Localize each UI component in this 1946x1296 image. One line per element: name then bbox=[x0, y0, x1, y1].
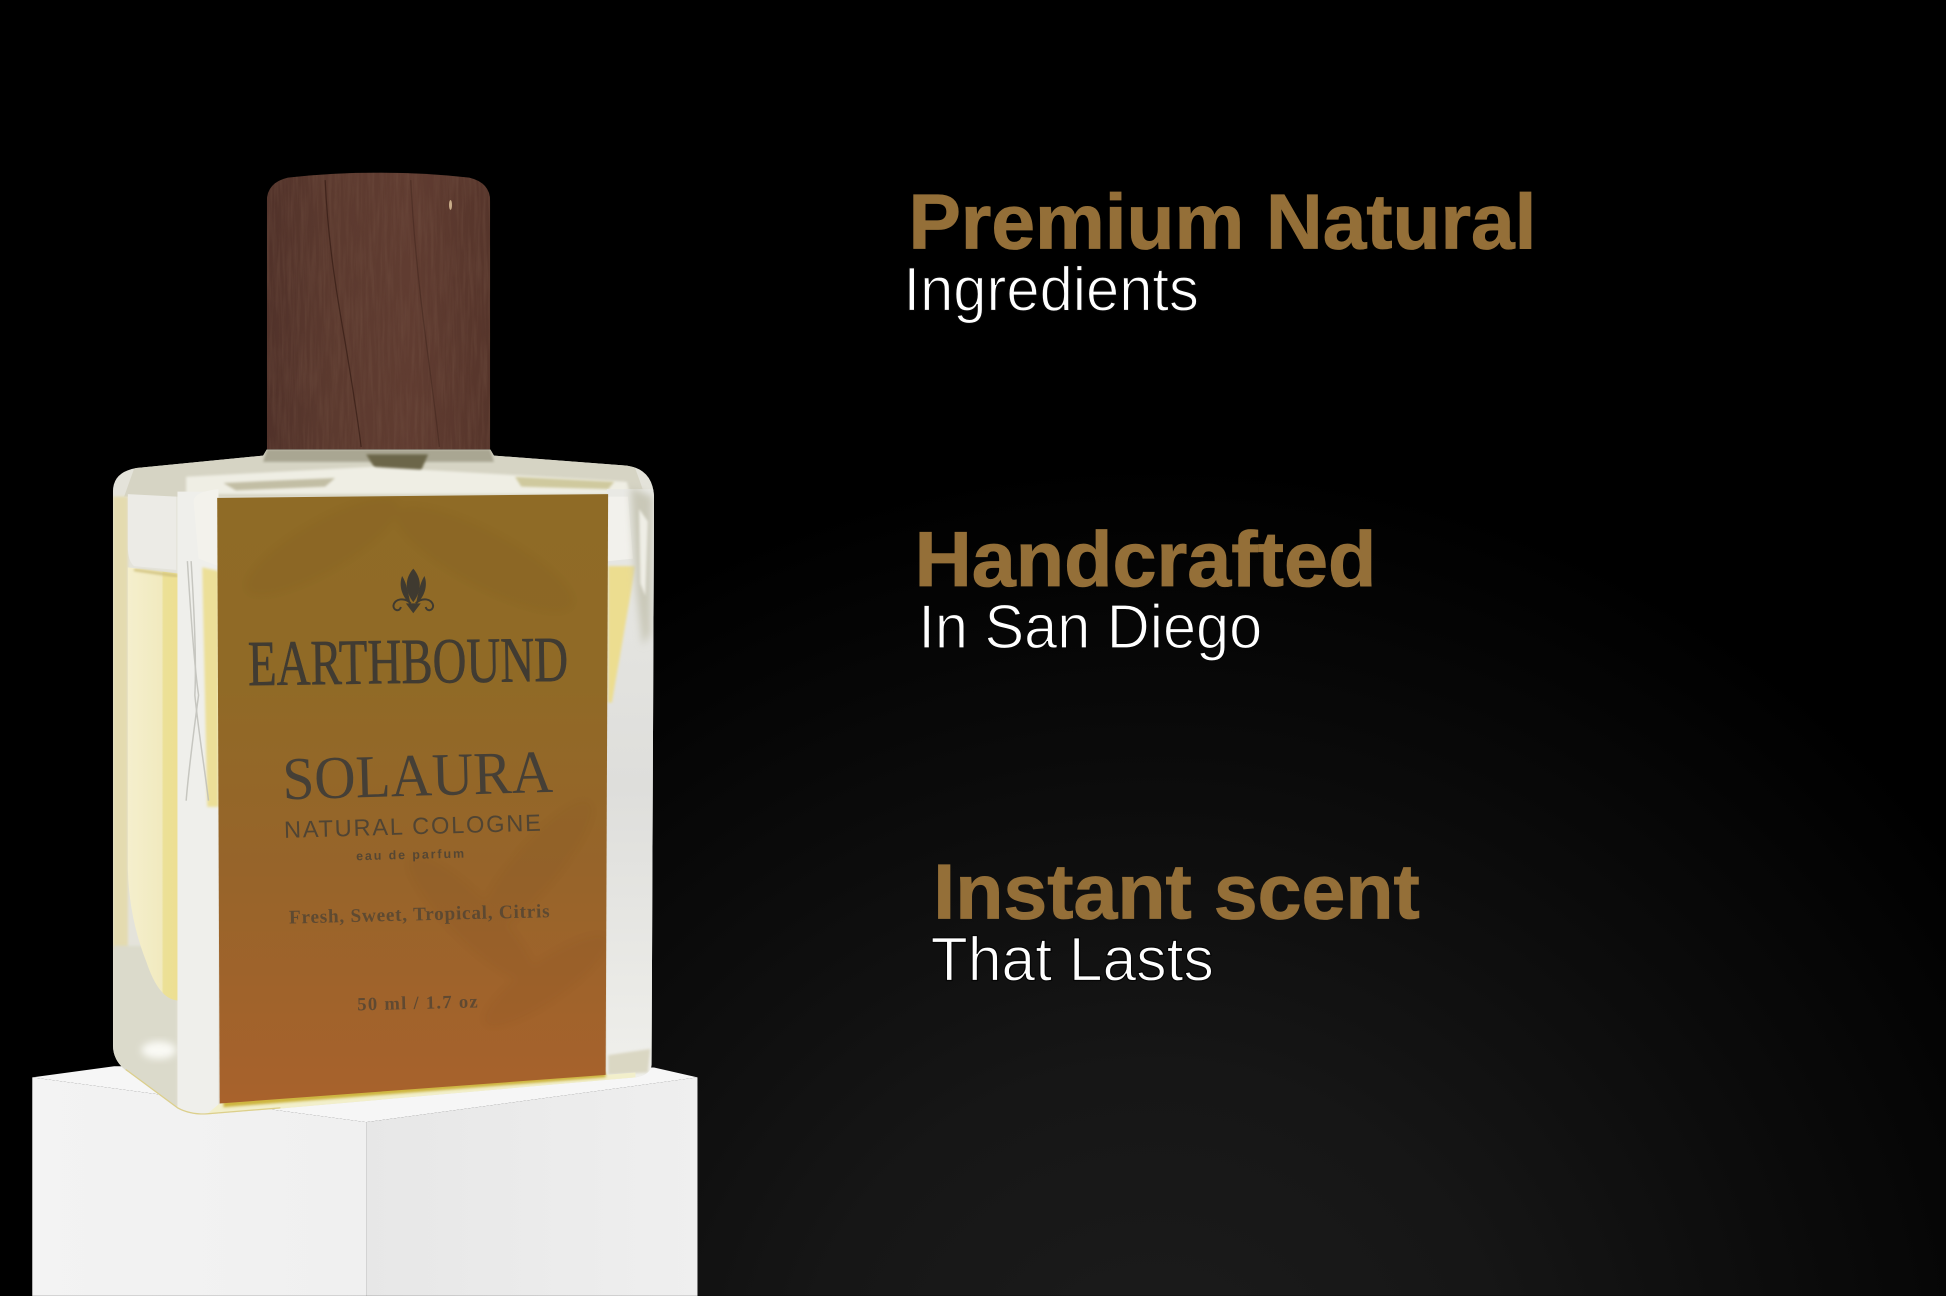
brand name: EARTHBOUND bbox=[247, 623, 569, 699]
base shine bbox=[608, 1049, 650, 1075]
eau de parfum: eau de parfum bbox=[356, 847, 464, 863]
wooden cap bbox=[267, 168, 490, 451]
volume: 50 ml / 1.7 oz bbox=[357, 991, 478, 1015]
product label bbox=[217, 481, 618, 1103]
white pedestal bbox=[32, 1066, 697, 1296]
feature: handcrafted in San Diego bbox=[915, 515, 1376, 662]
white panel beside label bbox=[177, 492, 218, 1118]
label leaf pattern bbox=[235, 481, 618, 1040]
scent notes: Fresh, Sweet, Tropical, Citris bbox=[289, 901, 550, 929]
perfume bottle bbox=[105, 168, 664, 1123]
feature: premium natural ingredients: Premium Natural bbox=[908, 177, 1536, 265]
right side glass bbox=[607, 489, 657, 1085]
wood grain lines bbox=[325, 180, 439, 447]
side air pocket bbox=[128, 494, 176, 570]
neck and shoulder bbox=[124, 447, 645, 497]
feature: premium natural ingredients bbox=[904, 177, 1536, 324]
product name: SOLAURA bbox=[281, 739, 554, 813]
feature: instant scent that lasts: That Lasts bbox=[931, 926, 1214, 995]
feature: premium natural ingredients: Ingredients bbox=[904, 255, 1199, 324]
feature: handcrafted in San Diego: In San Diego bbox=[918, 593, 1262, 662]
glass body bbox=[105, 441, 664, 1123]
feature: instant scent that lasts bbox=[931, 848, 1420, 995]
feature: handcrafted in San Diego: Handcrafted bbox=[915, 515, 1376, 603]
fleur-de-lis emblem bbox=[393, 569, 433, 613]
liquid left side bbox=[128, 567, 177, 1000]
product type: NATURAL COLOGNE bbox=[284, 810, 541, 843]
left edge band bbox=[113, 497, 128, 950]
feature: instant scent that lasts: Instant scent bbox=[933, 848, 1420, 936]
